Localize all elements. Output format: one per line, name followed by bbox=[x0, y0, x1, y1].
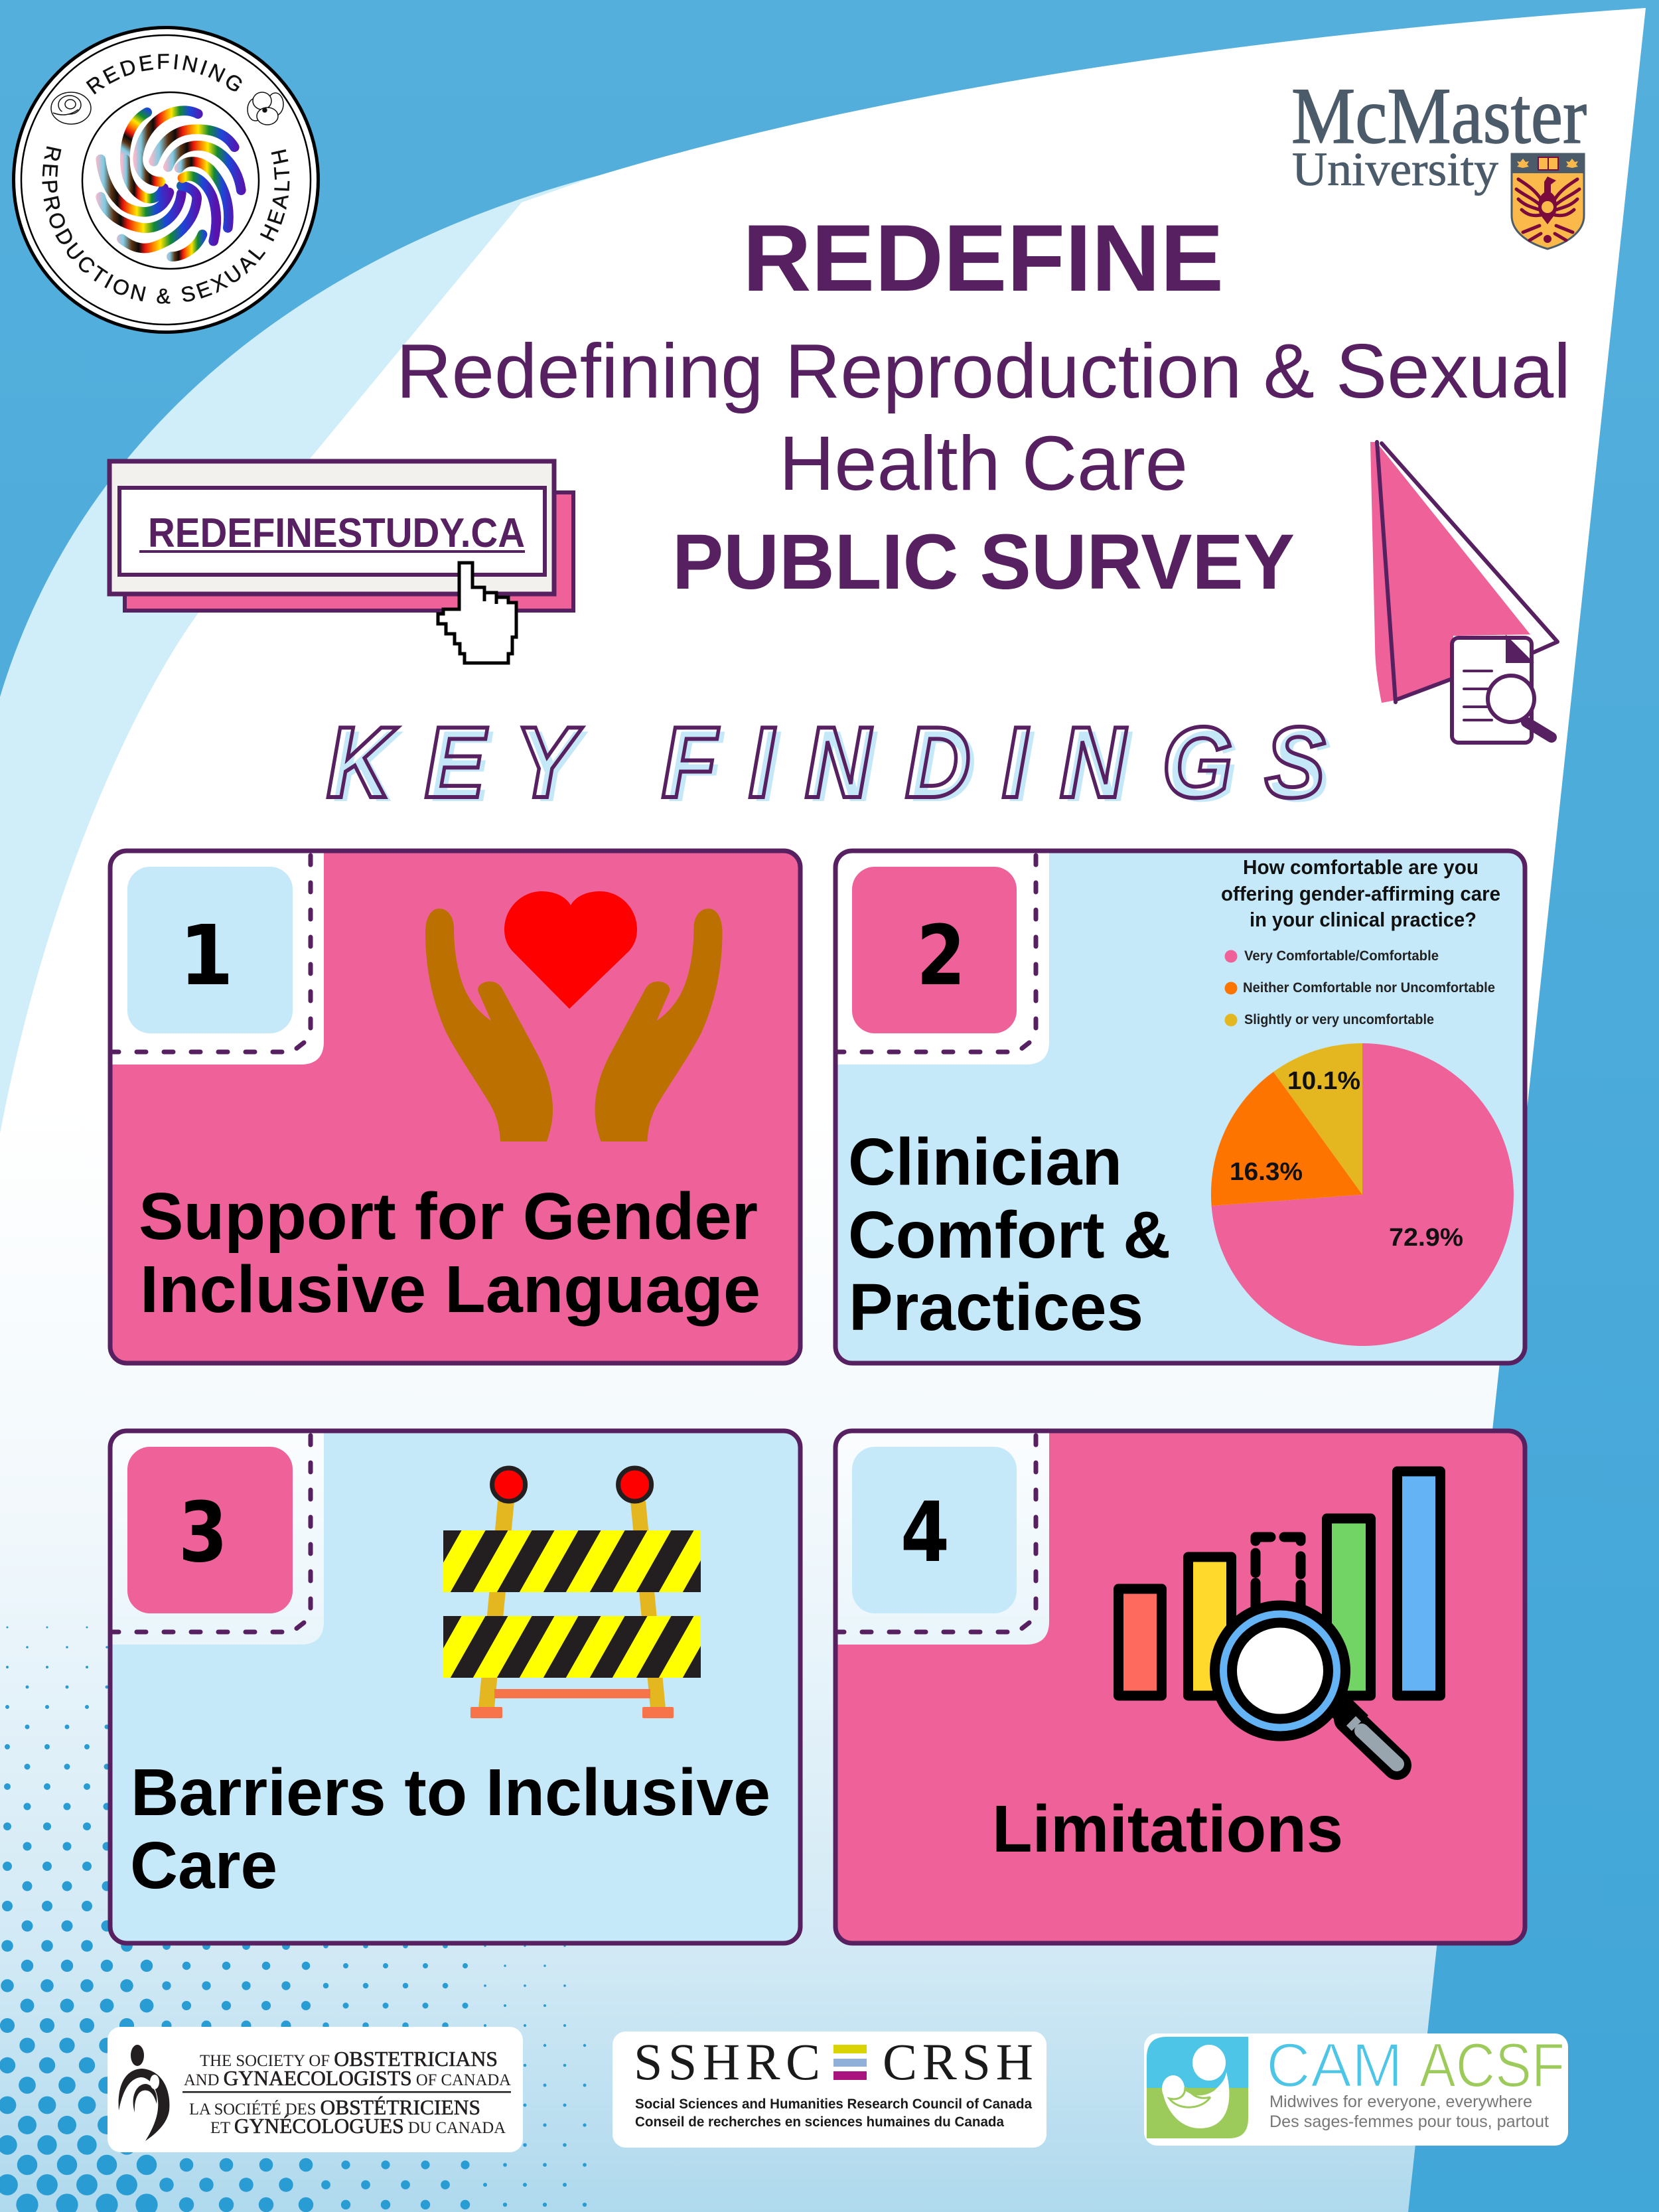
number tile 3: 3 bbox=[179, 1485, 228, 1581]
number tile 4 bbox=[852, 1447, 1017, 1613]
SOGC wordmark: LA SOCIÉTÉ DES OBSTÉTRICIENS bbox=[189, 2095, 480, 2119]
icon: hands holding heart bbox=[425, 891, 722, 1142]
icon: rose bbox=[51, 92, 91, 124]
panel 2 heading: Clinician bbox=[848, 1125, 1122, 1199]
SOGC wordmark: ET GYNÉCOLOGUES DU CANADA bbox=[210, 2114, 506, 2138]
logo: McMaster University bbox=[1291, 72, 1587, 249]
panel 1: support for gender inclusive language bbox=[110, 851, 800, 1363]
chart legend bbox=[1225, 948, 1495, 1027]
panel 3 heading: Barriers to Inclusive bbox=[131, 1755, 770, 1830]
tagline: Des sages-femmes pour tous, partout bbox=[1269, 2112, 1549, 2131]
panel 2 heading: Practices bbox=[849, 1270, 1143, 1345]
icon: crest bbox=[1512, 153, 1584, 249]
link text: REDEFINESTUDY.CA bbox=[148, 510, 525, 556]
subtitle line 1: Redefining Reproduction & Sexual bbox=[396, 328, 1571, 414]
logo card: SOGC bbox=[108, 2027, 523, 2152]
halftone dot pattern bbox=[7, 1627, 587, 2205]
chart legend: Slightly or very uncomfortable bbox=[1244, 1012, 1434, 1027]
chart question bbox=[1221, 855, 1500, 931]
icon: road barrier bbox=[443, 1465, 701, 1718]
number tile 2 bbox=[852, 867, 1017, 1033]
council names bbox=[635, 2097, 1032, 2130]
swirl bbox=[101, 111, 241, 257]
logo card: CAM ACSF bbox=[1144, 2030, 1568, 2146]
SOGC wordmark bbox=[182, 2047, 511, 2138]
number tile 1: 1 bbox=[179, 908, 234, 1004]
pie chart: 10.1% bbox=[1287, 1067, 1360, 1095]
number tile 2: 2 bbox=[916, 908, 966, 1004]
icon: bar chart with magnifier bbox=[1119, 1471, 1440, 1765]
heading: public survey: PUBLIC SURVEY bbox=[672, 518, 1295, 606]
pie chart: 16.3% bbox=[1230, 1158, 1303, 1186]
tagline: Midwives for everyone, everywhere bbox=[1269, 2093, 1532, 2111]
University wordmark: University bbox=[1292, 143, 1498, 196]
pie chart bbox=[1211, 1043, 1514, 1346]
number tile 1 bbox=[127, 867, 293, 1033]
number tile 4: 4 bbox=[901, 1485, 950, 1581]
panel 1 heading: Support for Gender bbox=[139, 1179, 758, 1254]
council names: Social Sciences and Humanities Research Council of Canada bbox=[635, 2097, 1032, 2112]
colour bars bbox=[833, 2045, 867, 2080]
panel 4: limitations bbox=[835, 1431, 1525, 1943]
panel 2: clinician comfort and practices bbox=[835, 851, 1525, 1363]
ACSF wordmark: ACSF bbox=[1419, 2030, 1565, 2100]
icon: pink cursor with document and magnifier bbox=[1370, 442, 1557, 743]
link button: redefinestudy.ca bbox=[109, 461, 573, 663]
icon: midwife and baby bbox=[1147, 2037, 1248, 2138]
chart legend: Neither Comfortable nor Uncomfortable bbox=[1243, 980, 1495, 995]
chart question: offering gender-affirming care bbox=[1221, 882, 1500, 905]
number tile 3 bbox=[127, 1447, 293, 1613]
magnifier bbox=[1526, 722, 1551, 737]
badge: redefining reproduction and sexual health logo bbox=[12, 26, 320, 334]
tagline bbox=[1269, 2093, 1549, 2131]
document bbox=[1452, 638, 1532, 743]
icon: pixel pointer hand bbox=[438, 563, 516, 663]
badge arc text top: REDEFINING bbox=[86, 54, 242, 94]
heading: key findings: KEYFINDINGS bbox=[326, 705, 1325, 819]
CRSH wordmark: CRSH bbox=[883, 2033, 1033, 2091]
subtitle line 2: Health Care bbox=[779, 420, 1188, 506]
panel 1 heading: Inclusive Language bbox=[140, 1252, 760, 1327]
panel 2 heading: Comfort & bbox=[848, 1198, 1171, 1272]
logo card: SSHRC CRSH bbox=[613, 2031, 1046, 2148]
SOGC wordmark: THE SOCIETY OF OBSTETRICIANS bbox=[200, 2047, 498, 2071]
panel 3 heading bbox=[130, 1755, 770, 1903]
title: REDEFINE: REDEFINE bbox=[743, 206, 1224, 311]
panel 3: barriers to inclusive care bbox=[110, 1431, 800, 1943]
SOGC wordmark: AND GYNAECOLOGISTS OF CANADA bbox=[184, 2066, 511, 2090]
chart question: How comfortable are you bbox=[1243, 855, 1479, 879]
McMaster wordmark: McMaster bbox=[1291, 72, 1587, 161]
chart question: in your clinical practice? bbox=[1250, 908, 1477, 931]
heading: key findings: KEYFINDINGS bbox=[332, 709, 1331, 823]
council names: Conseil de recherches en sciences humaines du Canada bbox=[635, 2114, 1004, 2130]
pie chart: 72.9% bbox=[1389, 1224, 1463, 1252]
icon: pansy bbox=[248, 92, 283, 125]
panel 2 heading bbox=[848, 1125, 1171, 1345]
icon: mother and child figure bbox=[119, 2045, 169, 2141]
badge arc text bottom: REPRODUCTION & SEXUAL HEALTH bbox=[42, 146, 289, 304]
chart legend: Very Comfortable/Comfortable bbox=[1244, 948, 1439, 964]
panel 1 heading bbox=[139, 1179, 760, 1327]
panel 3 heading: Care bbox=[130, 1828, 277, 1903]
panel 4 heading: Limitations bbox=[992, 1792, 1343, 1866]
SSHRC wordmark: SSHRC bbox=[634, 2033, 820, 2091]
CAM wordmark: CAM bbox=[1266, 2030, 1403, 2100]
